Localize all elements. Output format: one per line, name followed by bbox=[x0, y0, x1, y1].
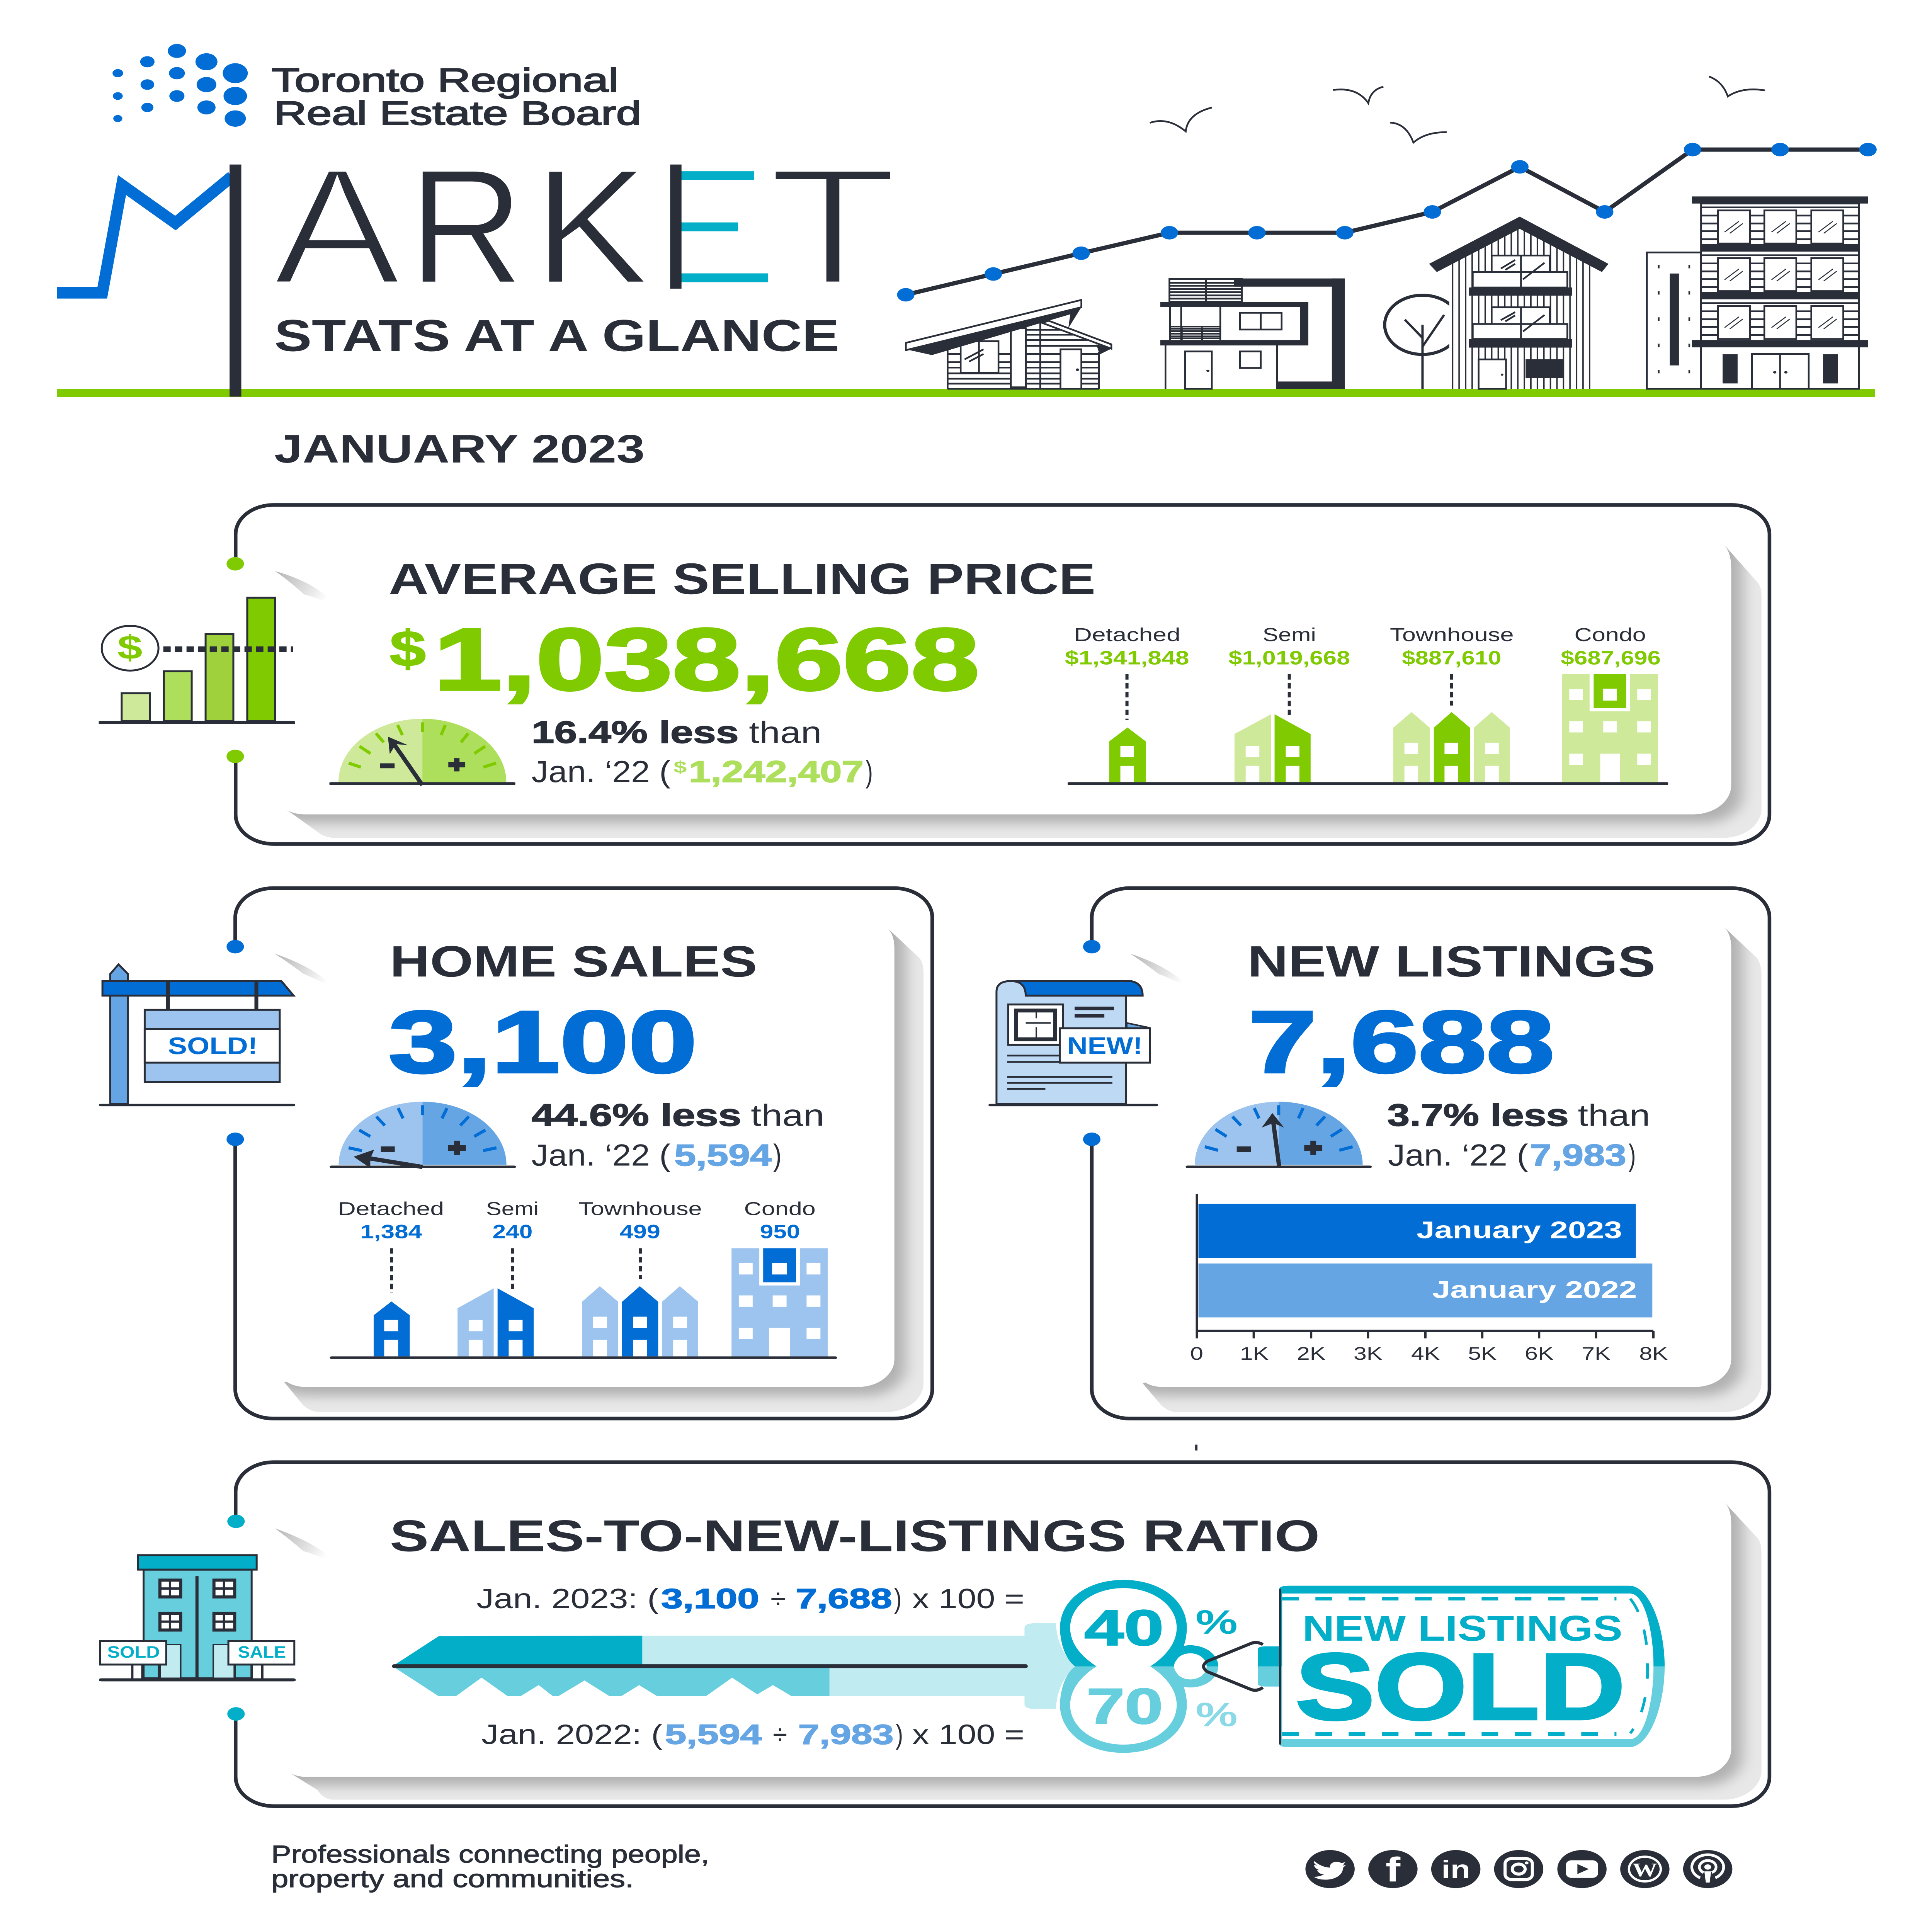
heading: HOME SALES bbox=[390, 937, 757, 986]
ratio 2022: 70 bbox=[1087, 1678, 1163, 1734]
title: MARKET: K bbox=[533, 135, 649, 318]
comparison text: than bbox=[749, 716, 821, 750]
key graphic bbox=[394, 1580, 1665, 1753]
bar labels: January 2023 bbox=[1417, 1217, 1622, 1243]
gauge bbox=[329, 719, 515, 785]
dollar sign: $ bbox=[117, 629, 143, 666]
sales by type labels: 499 bbox=[620, 1221, 660, 1243]
price by type labels: Semi bbox=[1263, 624, 1316, 645]
price by type labels: $1,341,848 bbox=[1065, 648, 1189, 669]
date: JANUARY 2023 bbox=[274, 427, 645, 471]
icon: linkedin: in bbox=[1441, 1855, 1470, 1883]
logo: TRREB dots bbox=[112, 44, 248, 127]
main value: $ bbox=[390, 621, 426, 677]
comparison text: than bbox=[751, 1099, 824, 1133]
gauge bbox=[1186, 1102, 1372, 1168]
tag text: NEW LISTINGS bbox=[1303, 1608, 1622, 1648]
key blade bbox=[394, 1636, 1026, 1696]
house icons green bbox=[1068, 674, 1668, 785]
frame connectors bbox=[226, 557, 244, 763]
key center line bbox=[394, 1664, 1026, 1668]
icon: listing sheet bbox=[988, 981, 1158, 1106]
comparison text bbox=[531, 1098, 824, 1172]
icon: facebook: f bbox=[1386, 1850, 1401, 1889]
axis labels: 0 bbox=[1190, 1344, 1203, 1364]
formula 2023: ÷ bbox=[770, 1583, 786, 1614]
comparison text: Jan. ‘22 ( bbox=[1388, 1139, 1528, 1172]
key rings and tag bbox=[1060, 1580, 1665, 1753]
axis labels: 3K bbox=[1354, 1344, 1382, 1364]
frame connectors bbox=[1083, 940, 1100, 1146]
price by type labels: Detached bbox=[1074, 624, 1180, 645]
sales by type labels bbox=[338, 1198, 816, 1243]
axis labels: 5K bbox=[1468, 1344, 1497, 1364]
main value: 7,688 bbox=[1248, 993, 1554, 1091]
price by type labels: $687,696 bbox=[1561, 648, 1661, 669]
sales by type labels: 950 bbox=[760, 1221, 800, 1243]
comparison text: $ bbox=[673, 759, 687, 777]
logo wordmark: Toronto Regional bbox=[272, 62, 619, 99]
formula 2022: 5,594 bbox=[665, 1719, 762, 1750]
bar chart: new listings: January 2022 bbox=[1432, 1277, 1637, 1303]
formula 2022: Jan. 2022: ( bbox=[481, 1719, 663, 1750]
card bbox=[265, 509, 1731, 815]
axis labels bbox=[1190, 1344, 1668, 1364]
title: MARKET: R bbox=[408, 135, 524, 318]
formula 2023 bbox=[476, 1583, 1024, 1614]
icon: facebook bbox=[1368, 1850, 1418, 1889]
formula 2022: ÷ bbox=[773, 1719, 787, 1750]
ratio 2023: % bbox=[1196, 1604, 1238, 1641]
icon: sold sign bbox=[99, 964, 295, 1106]
tree bbox=[1385, 295, 1460, 389]
line chart over houses bbox=[897, 143, 1877, 301]
comparison text: 1,242,407 bbox=[689, 755, 864, 789]
title: MARKET bbox=[57, 133, 898, 320]
page curl bbox=[275, 571, 337, 607]
icon: wordpress bbox=[1620, 1850, 1670, 1888]
house: modern bbox=[1160, 279, 1345, 389]
formula 2022: ) bbox=[896, 1719, 903, 1750]
icon: podcast bbox=[1683, 1850, 1732, 1888]
bars bbox=[1197, 1194, 1653, 1338]
birds bbox=[1150, 77, 1765, 143]
house icons blue bbox=[330, 1248, 837, 1359]
formula 2023: 7,688 bbox=[796, 1583, 892, 1614]
card bbox=[265, 1466, 1731, 1777]
sign labels bbox=[107, 1643, 286, 1662]
panel: new listings bbox=[988, 888, 1781, 1420]
panel frame bbox=[236, 505, 1769, 844]
footer tagline: Professionals connecting people, bbox=[271, 1840, 709, 1868]
comparison text: Jan. ‘22 ( bbox=[531, 755, 670, 789]
header bbox=[57, 44, 1877, 471]
comparison text: ) bbox=[773, 1139, 782, 1172]
main value: 1,038,668 bbox=[434, 610, 979, 708]
page curl bbox=[1131, 954, 1192, 990]
card shadow bbox=[284, 545, 1762, 838]
title: MARKET: A bbox=[273, 134, 402, 319]
footer tagline bbox=[271, 1840, 709, 1893]
comparison text: 44.6% less bbox=[531, 1098, 742, 1133]
price by type labels bbox=[1065, 624, 1661, 669]
comparison text bbox=[1387, 1098, 1650, 1172]
tag text: SOLD bbox=[1296, 1634, 1625, 1739]
formula 2022 bbox=[481, 1719, 1024, 1750]
comparison text: 3.7% less bbox=[1387, 1098, 1569, 1133]
building: condo bbox=[1647, 196, 1868, 389]
ratio 2023: 40 bbox=[1084, 1600, 1164, 1656]
icon: building with signs bbox=[99, 1555, 296, 1681]
sales by type labels: Townhouse bbox=[578, 1198, 702, 1219]
sign labels: SALE bbox=[238, 1643, 286, 1662]
icon: rising bars with dollar bbox=[99, 598, 295, 724]
sales by type labels: 240 bbox=[493, 1221, 532, 1243]
ratio 2022 bbox=[1087, 1678, 1238, 1734]
social icons bbox=[1305, 1850, 1732, 1889]
title: MARKET: T bbox=[767, 133, 898, 320]
sign label: SOLD! bbox=[168, 1033, 258, 1060]
house: tall gable bbox=[1429, 217, 1609, 389]
comparison text: 7,983 bbox=[1530, 1139, 1626, 1172]
price by type labels: Townhouse bbox=[1390, 624, 1514, 645]
frame connectors bbox=[226, 940, 244, 1146]
comparison text: ) bbox=[1629, 1139, 1636, 1172]
logo wordmark bbox=[272, 62, 641, 132]
icon: wordpress: W bbox=[1633, 1859, 1657, 1881]
card bbox=[1121, 893, 1731, 1387]
card bbox=[265, 893, 895, 1387]
comparison text bbox=[531, 715, 873, 789]
gauge bbox=[330, 1102, 516, 1168]
main value: 3,100 bbox=[389, 993, 697, 1091]
panel: sales-to-new-listings ratio bbox=[99, 1462, 1781, 1806]
title vertical bar bbox=[230, 165, 242, 397]
heading: SALES-TO-NEW-LISTINGS RATIO bbox=[390, 1511, 1320, 1561]
formula 2022: x 100 = bbox=[912, 1719, 1024, 1750]
page curl bbox=[275, 954, 337, 990]
comparison text: than bbox=[1578, 1099, 1650, 1133]
panel: home sales bbox=[99, 888, 947, 1420]
formula 2023: Jan. 2023: ( bbox=[476, 1583, 659, 1614]
frame connectors bbox=[227, 1515, 245, 1721]
formula 2022: 7,983 bbox=[798, 1719, 894, 1750]
icon: linkedin bbox=[1431, 1850, 1480, 1888]
price by type labels: $887,610 bbox=[1402, 648, 1501, 669]
formula 2023: x 100 = bbox=[912, 1583, 1024, 1614]
logo wordmark: Real Estate Board bbox=[274, 95, 641, 132]
axis labels: 4K bbox=[1411, 1344, 1440, 1364]
panel: average selling price bbox=[99, 498, 1781, 849]
panel frame bbox=[236, 1462, 1769, 1806]
title: MARKET: E bbox=[655, 136, 780, 316]
sales by type labels: Detached bbox=[338, 1198, 444, 1219]
heading: NEW LISTINGS bbox=[1247, 937, 1655, 986]
comparison text: 5,594 bbox=[674, 1139, 772, 1172]
sales by type labels: 1,384 bbox=[360, 1221, 422, 1243]
comparison text: ) bbox=[866, 755, 873, 789]
panel frame bbox=[1092, 888, 1769, 1418]
house: slanted roof bbox=[906, 300, 1111, 389]
comparison text: 16.4% less bbox=[531, 715, 739, 750]
sign labels: SOLD bbox=[107, 1643, 160, 1662]
formula 2023: ) bbox=[894, 1583, 901, 1614]
icon: twitter bbox=[1305, 1850, 1355, 1888]
comparison text: Jan. ‘22 ( bbox=[531, 1139, 670, 1172]
key shoulder bbox=[1024, 1623, 1075, 1709]
page curl bbox=[275, 1528, 337, 1564]
panel frame bbox=[235, 888, 932, 1418]
price by type labels: Condo bbox=[1575, 624, 1646, 645]
card shadow bbox=[265, 1466, 1781, 1806]
ratio 2023 bbox=[1084, 1600, 1238, 1656]
card shadow bbox=[265, 893, 947, 1420]
price by type labels: $1,019,668 bbox=[1228, 648, 1350, 669]
axis labels: 1K bbox=[1240, 1344, 1269, 1364]
sales by type labels: Condo bbox=[744, 1198, 816, 1219]
icon: instagram bbox=[1494, 1850, 1543, 1888]
illustration: street of houses bbox=[906, 77, 1868, 389]
axis labels: 6K bbox=[1525, 1344, 1553, 1364]
bar chart: new listings bbox=[1190, 1194, 1668, 1364]
axis labels: 8K bbox=[1639, 1344, 1668, 1364]
axis labels: 2K bbox=[1297, 1344, 1325, 1364]
sales by type labels: Semi bbox=[486, 1198, 539, 1219]
ground line bbox=[57, 389, 1875, 397]
icon: youtube bbox=[1557, 1850, 1607, 1888]
heading: AVERAGE SELLING PRICE bbox=[389, 554, 1095, 603]
axis labels: 7K bbox=[1582, 1344, 1611, 1364]
card shadow bbox=[1121, 893, 1781, 1420]
ratio 2022: % bbox=[1196, 1696, 1238, 1733]
formula 2023: 3,100 bbox=[661, 1583, 759, 1614]
footer tagline: property and communities. bbox=[271, 1865, 634, 1893]
subtitle: STATS AT A GLANCE bbox=[274, 311, 840, 361]
new badge label: NEW! bbox=[1067, 1032, 1143, 1059]
